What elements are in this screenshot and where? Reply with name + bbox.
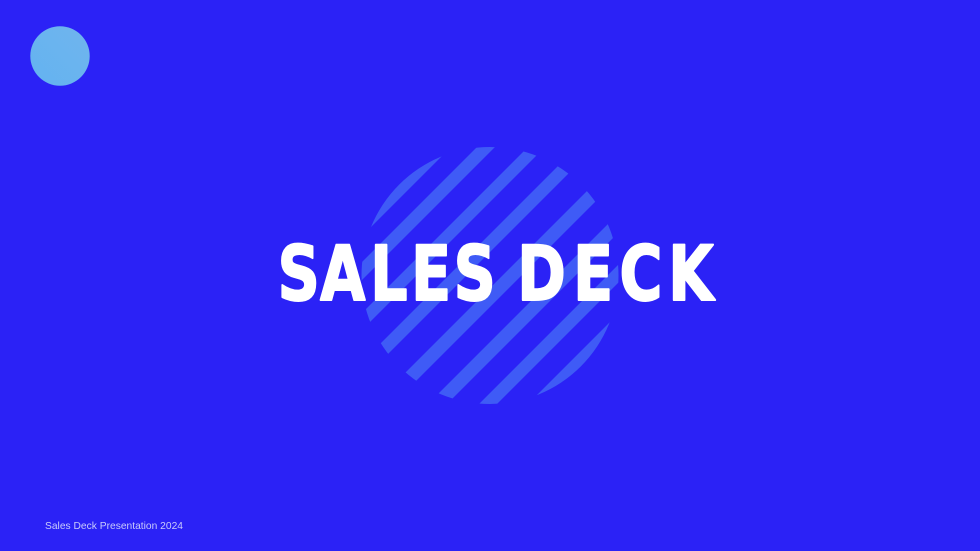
- title: SALES DECK: [278, 230, 716, 318]
- icon: light blue circle: [30, 26, 90, 86]
- footer text: Sales Deck Presentation 2024: [45, 520, 183, 532]
- slide canvas: [30, 26, 716, 529]
- striped circle: [362, 147, 618, 404]
